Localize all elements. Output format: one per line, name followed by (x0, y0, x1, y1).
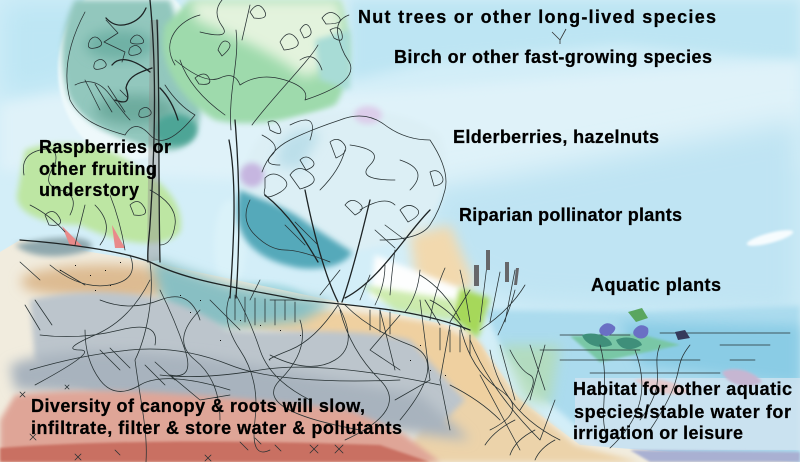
label: habitat: species/stable water for (574, 402, 791, 422)
birch trunk and branches (229, 140, 234, 298)
ground layers (0, 238, 800, 462)
label: diversity of canopy and roots: Diversity of canopy & roots will slow, (31, 396, 365, 416)
label: raspberries: Raspberries or (39, 137, 171, 157)
nut tree halo (58, 0, 202, 160)
label: aquatic plants: Aquatic plants (591, 275, 721, 295)
label: diversity of canopy and roots: infiltrate, filter & store water & pollutants (31, 418, 402, 438)
red soil marks (20, 385, 343, 461)
raspberry canopy (17, 143, 181, 243)
nut tree canopy (62, 0, 201, 151)
flower marks (264, 139, 443, 222)
water lines (540, 333, 790, 373)
water (485, 306, 800, 462)
ground surface (20, 240, 470, 330)
birch canopy (163, 0, 349, 123)
soil speckles (60, 262, 446, 376)
label: elderberries: Elderberries, hazelnuts (453, 127, 659, 147)
label: raspberries: understory (39, 180, 139, 200)
root systems (30, 262, 513, 462)
panel: tree canopies (17, 0, 680, 362)
root hair hatching (235, 295, 470, 355)
bank grasses (450, 340, 560, 460)
cattails and grass (360, 250, 525, 335)
label: birch: Birch or other fast-growing species (394, 47, 712, 67)
elderberry shrubs (265, 190, 430, 302)
label: raspberries: other fruiting (39, 159, 157, 179)
label: nut trees: Nut trees or other long-lived species (358, 7, 716, 27)
raspberry shrubs (23, 149, 175, 250)
label: habitat: irrigation or leisure (573, 423, 743, 443)
label: riparian pollinator plants: Riparian pollinator plants (459, 205, 682, 225)
icon: small bird in sky (552, 29, 566, 44)
label: habitat: Habitat for other aquatic (573, 379, 792, 399)
lily pads and flowers (582, 333, 642, 349)
elderberry canopy (240, 111, 447, 262)
nut tree trunk and branches (147, 20, 160, 262)
